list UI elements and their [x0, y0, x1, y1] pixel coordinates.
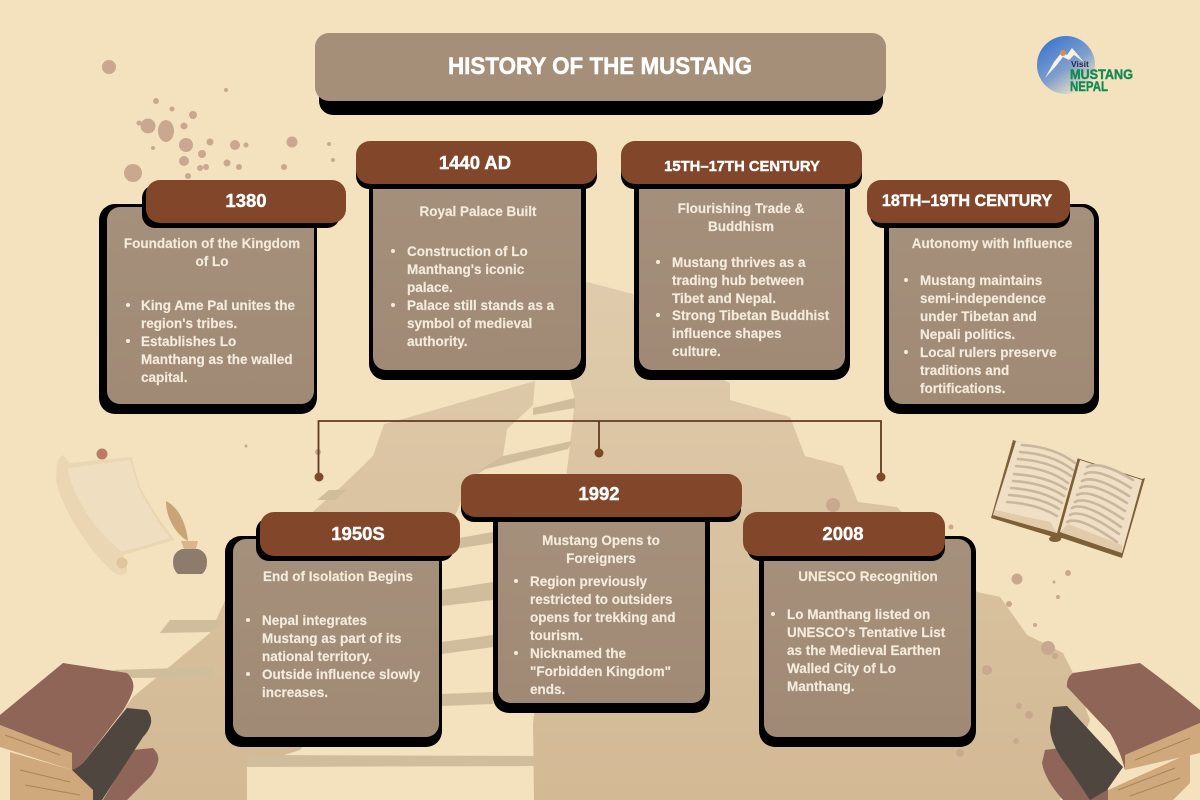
panel: 2008: UNESCO Recognition — [798, 569, 938, 584]
panel: 1992: Foreigners — [566, 551, 636, 566]
panel: 1440 AD — [356, 141, 597, 380]
panel: 1950s: Outside influence slowly — [262, 667, 421, 682]
panel: 1380: Manthang as the walled — [141, 352, 293, 367]
illustration: stacked books left — [0, 663, 158, 800]
panel: 1950s — [225, 512, 460, 747]
panel: 2008: Manthang. — [787, 679, 854, 694]
panel: 1950s: Nepal integrates — [262, 613, 367, 628]
panel: 1992: Region previously — [530, 574, 648, 589]
logo: Visit Mustang Nepal: Visit — [1071, 59, 1089, 69]
panel: 1992 — [461, 474, 742, 713]
panel: 1950s: national territory. — [262, 649, 372, 664]
panel: 15th-17th century: Strong Tibetan Buddhist — [672, 308, 830, 323]
panel: 1992: opens for trekking and — [530, 610, 676, 625]
panel: 1380: of Lo — [196, 254, 228, 269]
panel: 18th-19th century: fortifications. — [920, 381, 1006, 396]
logo: Visit Mustang Nepal — [1037, 36, 1133, 94]
panel: 2008 — [743, 512, 976, 747]
panel: 1992: ends. — [530, 682, 565, 697]
panel: 1380: King Ame Pal unites the — [141, 298, 296, 313]
panel: 15th-17th century: Tibet and Nepal. — [672, 291, 776, 306]
panel: 1440 AD: palace. — [407, 280, 453, 295]
panel: 1380: Establishes Lo — [141, 334, 236, 349]
panel: 1440 AD: Royal Palace Built — [419, 204, 537, 219]
icon: feather and inkwell — [166, 501, 207, 574]
panel: 2008: as the Medieval Earthen — [787, 643, 941, 658]
panel: 1992: "Forbidden Kingdom" — [530, 664, 671, 679]
panel: 18th-19th century: under Tibetan and — [920, 309, 1037, 324]
panel: 15th-17th century: Flourishing Trade & — [678, 201, 805, 216]
illustration: open book — [991, 440, 1145, 558]
panel: 15th-17th century: Buddhism — [708, 219, 774, 234]
panel: 15th-17th century: culture. — [672, 344, 721, 359]
panel: 15th-17th century: trading hub between — [672, 273, 804, 288]
decorative paint splatters — [102, 60, 1071, 757]
panel: 2008: Walled City of Lo — [787, 661, 896, 676]
illustration: stacked books right — [1042, 663, 1200, 800]
panel: 15th-17th century: 15TH–17TH CENTURY — [664, 159, 820, 175]
panel: 1992: Nicknamed the — [530, 646, 627, 661]
title banner — [315, 33, 886, 115]
panel: 18th-19th century — [867, 180, 1099, 414]
panel: 1380: 1380 — [225, 190, 267, 211]
logo: Visit Mustang Nepal: MUSTANG — [1070, 67, 1133, 82]
panel: 18th-19th century: Local rulers preserve — [920, 345, 1057, 360]
panel: 1950s: 1950S — [331, 523, 385, 544]
panel: 2008: 2008 — [822, 523, 864, 544]
panel: 18th-19th century: traditions and — [920, 363, 1009, 378]
title banner: HISTORY OF THE MUSTANG — [448, 53, 752, 80]
panel: 1380: capital. — [141, 370, 188, 385]
panel: 1440 AD: authority. — [407, 334, 468, 349]
panel: 18th-19th century: Autonomy with Influence — [912, 236, 1073, 251]
panel: 1992: restricted to outsiders — [530, 592, 673, 607]
panel: 1380: Foundation of the Kingdom — [124, 236, 300, 251]
panel: 1440 AD: symbol of medieval — [407, 316, 532, 331]
panel: 18th-19th century: Nepali politics. — [920, 327, 1015, 342]
panel: 18th-19th century: semi-independence — [920, 291, 1047, 306]
panel: 15th-17th century: influence shapes — [672, 326, 782, 341]
panel: 1992: tourism. — [530, 628, 583, 643]
panel: 1440 AD: Palace still stands as a — [407, 298, 555, 313]
panel: 1440 AD: Manthang's iconic — [407, 262, 525, 277]
panel: 1440 AD: 1440 AD — [439, 152, 511, 173]
connector lines to the lower timeline — [314, 421, 886, 482]
panel: 18th-19th century: Mustang maintains — [920, 273, 1042, 288]
background: mountain fortress silhouette — [60, 282, 1090, 800]
panel: 1380 — [99, 180, 346, 414]
panel: 1992: 1992 — [578, 483, 620, 504]
panel: 1950s: Mustang as part of its — [262, 631, 402, 646]
logo: Visit Mustang Nepal: NEPAL — [1070, 79, 1108, 94]
panel: 1992: Mustang Opens to — [542, 533, 660, 548]
panel: 1440 AD: Construction of Lo — [407, 244, 528, 259]
panel: 2008: Lo Manthang listed on — [787, 607, 930, 622]
panel: 15th-17th century — [621, 141, 862, 380]
panel: 15th-17th century: Mustang thrives as a — [672, 255, 806, 270]
panel: 1950s: increases. — [262, 685, 328, 700]
panel: 2008: UNESCO's Tentative List — [787, 625, 946, 640]
panel: 18th-19th century: 18TH–19TH CENTURY — [882, 192, 1052, 210]
illustration: parchment scroll — [56, 448, 175, 575]
panel: 1950s: End of Isolation Begins — [263, 569, 413, 584]
panel: 1380: region's tribes. — [141, 316, 237, 331]
